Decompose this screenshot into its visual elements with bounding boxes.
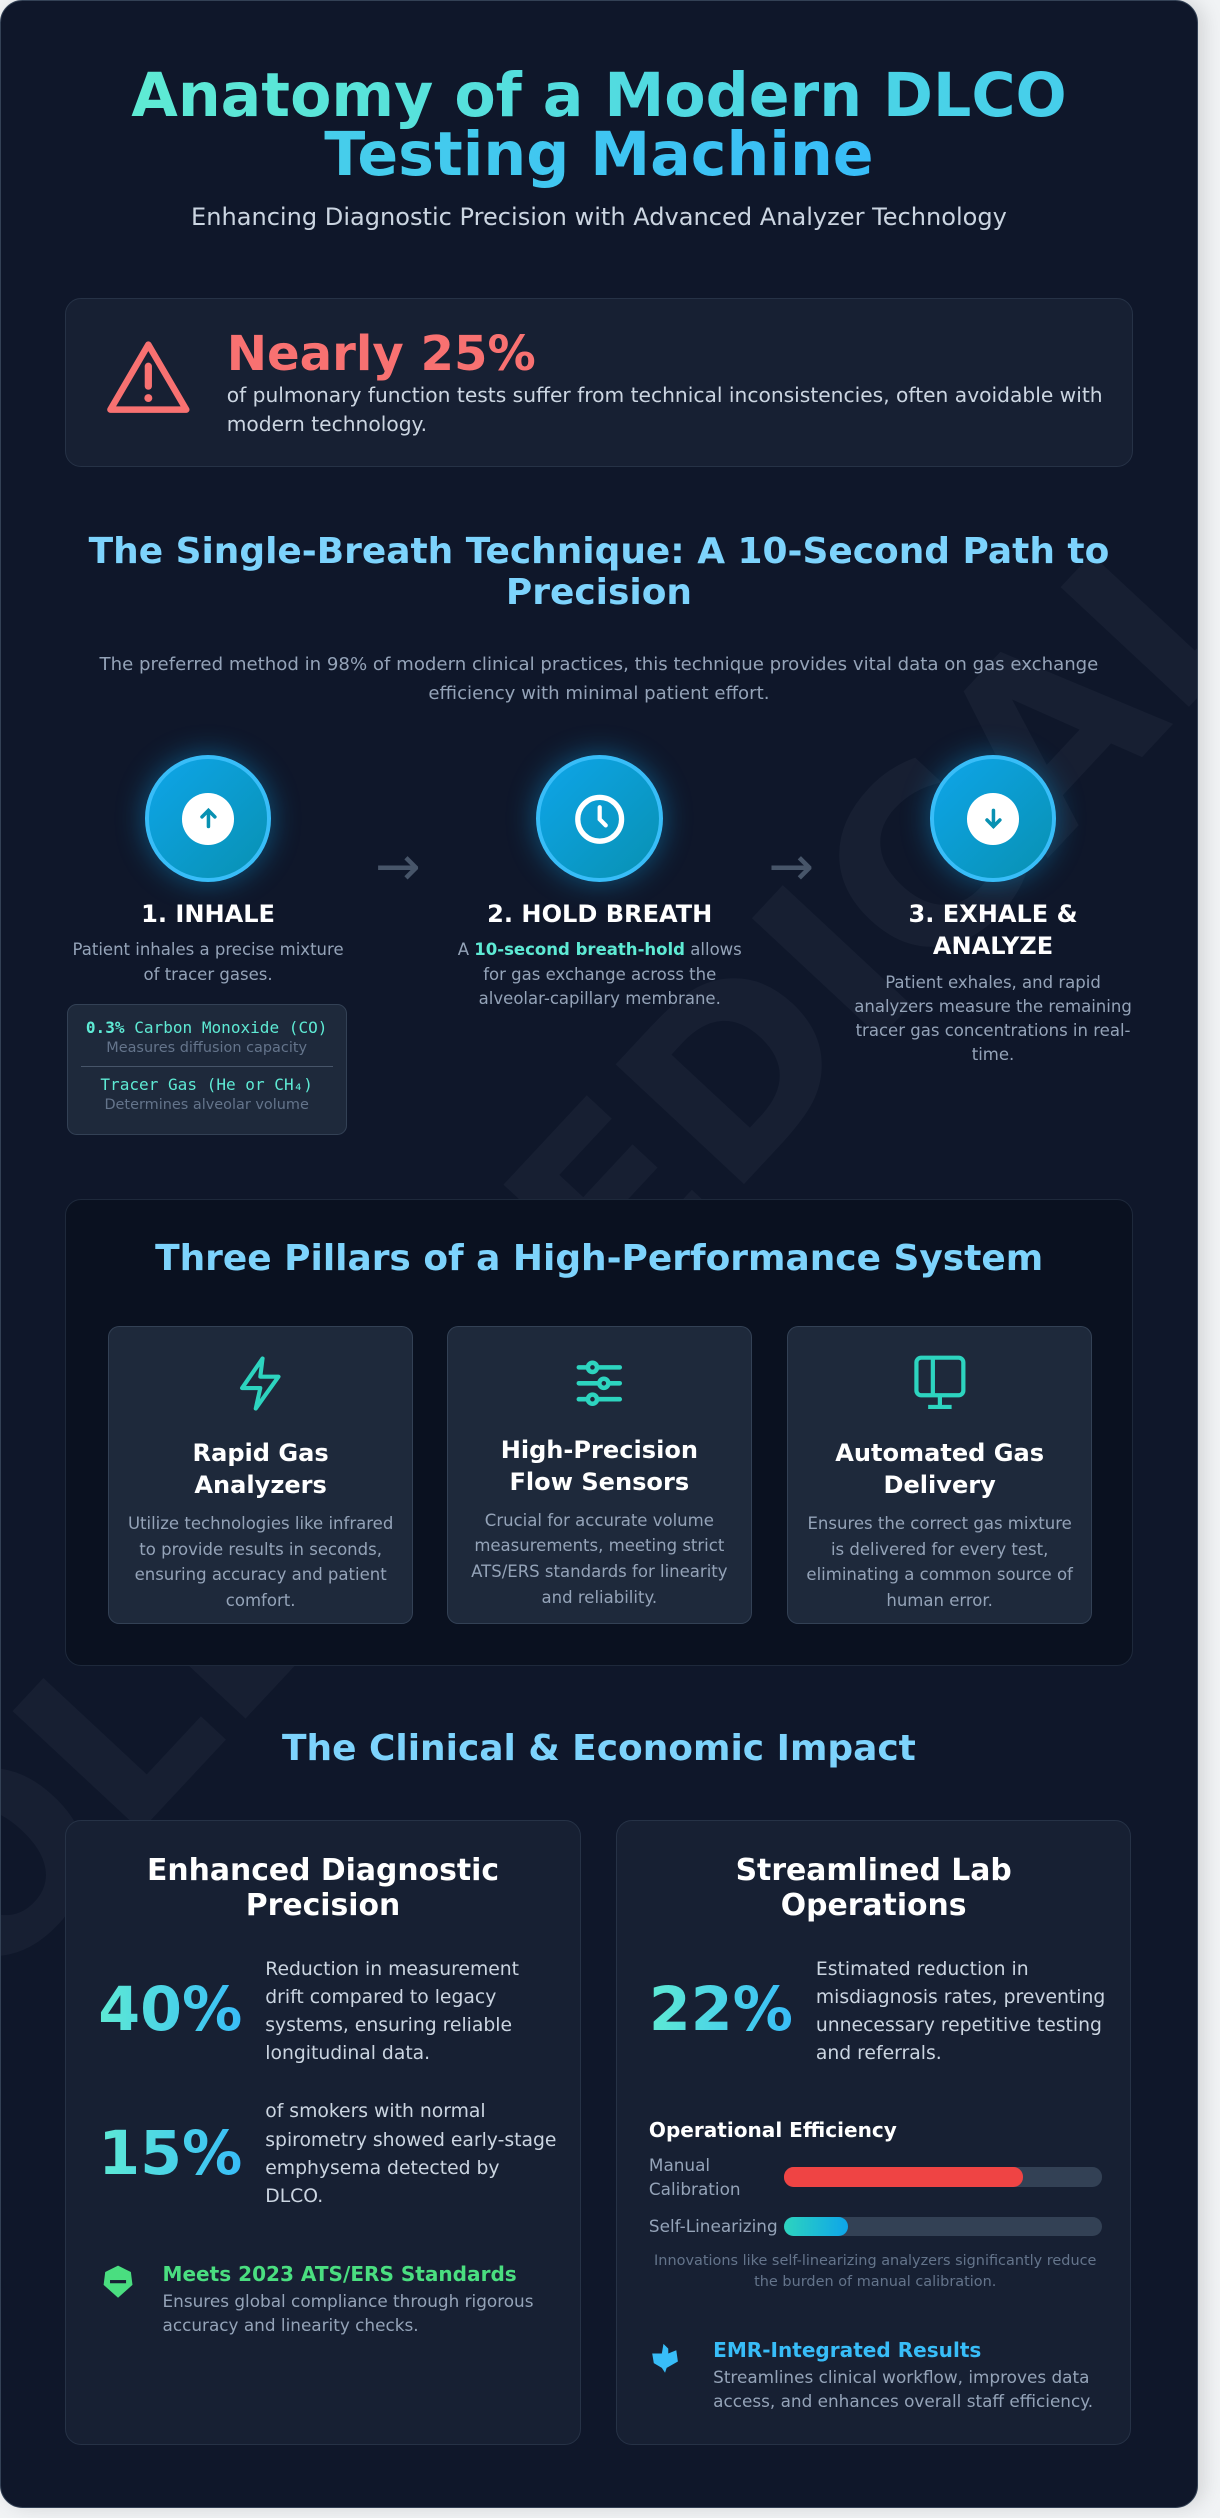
icon: badge xyxy=(104,2266,132,2298)
pillar 3 xyxy=(787,1326,1092,1624)
emr text xyxy=(713,2338,1093,2411)
pillar 2 xyxy=(447,1326,752,1624)
step 1: 1. INHALE xyxy=(141,900,275,928)
step 2 xyxy=(458,738,742,1008)
emr text: Streamlines clinical workflow, improves data access, and enhances overall staff efficiency. xyxy=(713,2367,1093,2411)
pillar 1: Utilize technologies like infrared to provide results in seconds, ensuring accuracy and patient comfort. xyxy=(128,1514,393,1610)
stat 40%: 40% xyxy=(98,1975,242,2045)
gas box xyxy=(67,1004,347,1135)
icon: sliders xyxy=(576,1360,622,1406)
standards callout: Meets 2023 ATS/ERS Standards xyxy=(163,2262,517,2286)
intro paragraph: The preferred method in 98% of modern clinical practices, this technique provides vital data on gas exchange efficiency with minimal patient effort. xyxy=(100,654,1098,704)
bar chart: operational efficiency: Manual xyxy=(649,2155,710,2175)
arrow 2: → xyxy=(768,834,814,898)
text 15%: emphysema detected by xyxy=(265,2158,500,2179)
panel: lab operations: Streamlined Lab xyxy=(736,1853,1012,1888)
stat 22%: 22% xyxy=(649,1975,793,2045)
alert box xyxy=(65,298,1133,467)
icon: clock xyxy=(536,755,663,882)
text 40% xyxy=(265,1959,519,2064)
step 1 xyxy=(72,738,344,984)
panel: diagnostic precision: Enhanced Diagnostic xyxy=(147,1853,499,1888)
icon: emr hand xyxy=(652,2344,678,2373)
step 1: Patient inhales a precise mixture xyxy=(72,940,344,959)
pillar 2: High-Precision xyxy=(501,1436,698,1464)
pillar 2: Flow Sensors xyxy=(510,1468,689,1496)
standards callout xyxy=(163,2262,534,2335)
step 3: analyzers measure the remaining xyxy=(854,997,1132,1016)
icon: warning triangle xyxy=(107,341,190,413)
text 40%: Reduction in measurement xyxy=(265,1959,519,1980)
pillar 3: Ensures the correct gas mixture is delivered for every test, eliminating a common source of human error. xyxy=(806,1514,1073,1610)
step 3: 3. EXHALE & xyxy=(908,900,1078,928)
emr text: EMR-Integrated Results xyxy=(713,2338,981,2362)
stat 15%: 15% xyxy=(98,2119,242,2189)
text 22%: and referrals. xyxy=(816,2043,942,2064)
icon: inhale xyxy=(145,755,271,882)
pillar 1: Rapid Gas xyxy=(193,1439,329,1467)
pillar 3: Automated Gas xyxy=(835,1439,1044,1467)
step 3: time. xyxy=(972,1045,1014,1064)
title xyxy=(131,61,1067,190)
standards callout: Ensures global compliance through rigorous accuracy and linearity checks. xyxy=(163,2291,534,2335)
text 40%: systems, ensuring reliable xyxy=(265,2015,512,2036)
panel: lab operations: Operations xyxy=(781,1888,967,1923)
bar chart: operational efficiency xyxy=(649,2118,1102,2290)
text 22%: Estimated reduction in xyxy=(816,1959,1029,1980)
text 22%: unnecessary repetitive testing xyxy=(816,2015,1102,2036)
pillar 1: Analyzers xyxy=(194,1471,327,1499)
icon: exhale xyxy=(930,755,1056,882)
heading: impact: The Clinical & Economic Impact xyxy=(282,1728,916,1769)
pillar 1 xyxy=(108,1326,413,1624)
bar chart: operational efficiency: Self-Linearizing xyxy=(649,2216,778,2236)
step 3 xyxy=(854,739,1132,1064)
stat: Nearly 25% xyxy=(227,326,536,382)
gas box: Measures diffusion capacity xyxy=(106,1040,307,1056)
panel: lab operations xyxy=(616,1820,1131,2445)
step 3: tracer gas concentrations in real- xyxy=(856,1021,1130,1040)
arrow 1: → xyxy=(375,834,421,898)
bar chart: operational efficiency: Calibration xyxy=(649,2179,741,2199)
panel: three pillars xyxy=(65,1199,1133,1666)
icon: monitor xyxy=(914,1356,966,1409)
step 2: for gas exchange across the xyxy=(483,964,716,984)
pillar 3: Delivery xyxy=(883,1471,996,1499)
text 15%: of smokers with normal xyxy=(265,2101,486,2122)
step 2: 2. HOLD BREATH xyxy=(487,900,712,928)
text 22% xyxy=(816,1959,1105,2064)
subtitle: Enhancing Diagnostic Precision with Advanced Analyzer Technology xyxy=(191,203,1007,231)
alert text: of pulmonary function tests suffer from technical inconsistencies, often avoidable with modern technology. xyxy=(227,383,1103,436)
pillar 2: Crucial for accurate volume measurements, meeting strict ATS/ERS standards for linearity and reliability. xyxy=(471,1511,728,1607)
panel: diagnostic precision: Precision xyxy=(246,1888,400,1923)
step 3: Patient exhales, and rapid xyxy=(885,973,1101,992)
bar chart: operational efficiency: Operational Efficiency xyxy=(649,2118,897,2142)
title: Anatomy of a Modern DLCO xyxy=(131,61,1067,131)
text 40%: longitudinal data. xyxy=(265,2043,430,2064)
gas box: Tracer Gas (He or CH₄) xyxy=(100,1075,313,1094)
step 3: ANALYZE xyxy=(933,932,1053,960)
gas box: 0.3% Carbon Monoxide (CO) xyxy=(86,1018,327,1037)
step 2: A 10-second breath-hold allows xyxy=(458,940,742,959)
text 40%: drift compared to legacy xyxy=(265,1987,496,2008)
text 15% xyxy=(265,2101,556,2207)
title: Testing Machine xyxy=(324,120,874,190)
gas box: Determines alveolar volume xyxy=(104,1097,309,1113)
text 15%: DLCO. xyxy=(265,2186,323,2207)
heading: single-breath: The Single-Breath Technique: A 10-Second Path to Precision xyxy=(89,531,1109,613)
text 15%: spirometry showed early-stage xyxy=(265,2130,556,2151)
text 22%: misdiagnosis rates, preventing xyxy=(816,1987,1105,2008)
bar chart: operational efficiency: Innovations like self-linearizing analyzers significantly reduce the burden of manual calibration. xyxy=(654,2253,1096,2290)
heading: pillars: Three Pillars of a High-Performance System xyxy=(155,1238,1043,1279)
panel: diagnostic precision xyxy=(65,1820,581,2445)
icon: lightning xyxy=(240,1356,281,1411)
step 1: of tracer gases. xyxy=(144,964,273,984)
step 2: alveolar-capillary membrane. xyxy=(479,989,721,1008)
